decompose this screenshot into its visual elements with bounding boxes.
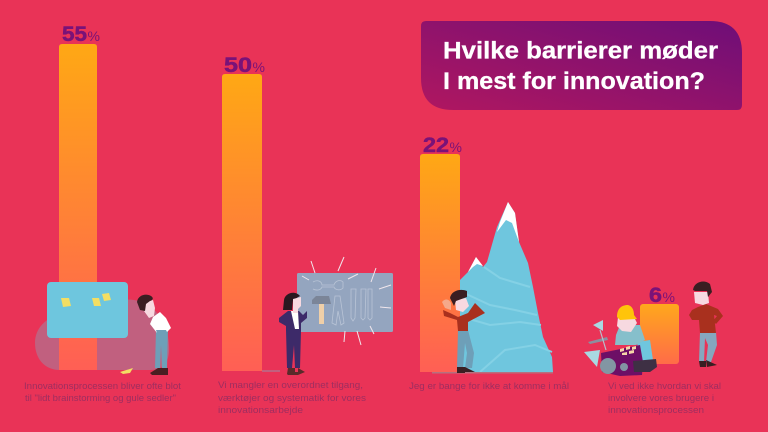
caption line 2: værktøjer og systematik for vores bbox=[218, 393, 366, 403]
value 55%: % bbox=[88, 28, 100, 44]
hammer bbox=[312, 296, 331, 304]
heading line 2: I mest for innovation? bbox=[443, 68, 705, 95]
column 2: tools bbox=[218, 54, 393, 415]
value 55% bbox=[62, 23, 100, 46]
column 1: brainstorming bbox=[24, 23, 181, 403]
value 22%: % bbox=[450, 139, 462, 155]
icon: man thinking bbox=[689, 282, 723, 367]
value 55%: 55 bbox=[62, 23, 87, 46]
icon: man looking up bbox=[442, 290, 485, 373]
value 6%: 6 bbox=[649, 284, 662, 307]
value 6% bbox=[649, 284, 675, 307]
bar 22% bbox=[420, 154, 460, 372]
mountain ground line bbox=[432, 372, 553, 374]
caption line 2: involvere vores brugere i bbox=[608, 393, 714, 403]
heading: Hvilke barrierer møder bbox=[443, 38, 718, 64]
caption line 3: innovationsprocessen bbox=[608, 405, 704, 415]
bar ground shadow bbox=[262, 370, 280, 372]
value 22%: 22 bbox=[423, 134, 449, 157]
caption line 2: til "lidt brainstorming og gule sedler" bbox=[25, 393, 176, 403]
value 50%: % bbox=[252, 59, 265, 75]
bar 55% bbox=[59, 44, 97, 370]
illustration shadow blob bbox=[35, 300, 169, 370]
icon: whiteboard with notes bbox=[47, 282, 128, 338]
value 6%: % bbox=[662, 289, 675, 305]
title panel bbox=[421, 21, 742, 110]
icon: woman bbox=[279, 293, 307, 375]
caption line 3: innovationsarbejde bbox=[218, 405, 303, 415]
icon: tool board bbox=[297, 257, 393, 345]
value 50%: 50 bbox=[224, 54, 252, 77]
bar 6% bbox=[640, 304, 679, 364]
column 3: mountain bbox=[409, 134, 569, 391]
caption: Jeg er bange for ikke at komme i mål bbox=[409, 381, 569, 391]
value 22% bbox=[423, 134, 462, 157]
caption: Vi ved ikke hvordan vi skal bbox=[608, 381, 721, 391]
caption: Innovationsprocessen bliver ofte blot bbox=[24, 381, 181, 391]
bar 50% bbox=[222, 74, 262, 371]
column 4: users bbox=[584, 282, 723, 415]
icon: man looking down bbox=[137, 295, 171, 375]
caption: Vi mangler en overordnet tilgang, bbox=[218, 380, 363, 390]
value 50% bbox=[224, 54, 265, 77]
icon: fallen note bbox=[120, 368, 133, 374]
icon: mountain bbox=[455, 202, 553, 372]
icon: person at machine bbox=[584, 305, 657, 376]
